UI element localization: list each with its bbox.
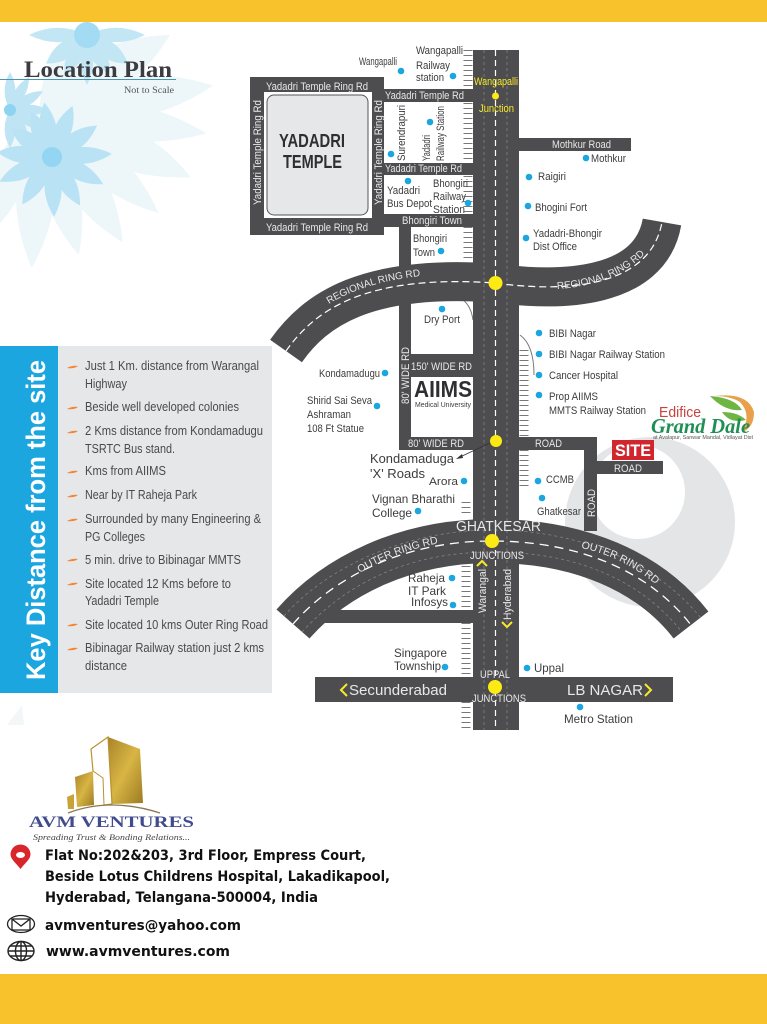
road labels: 80' WIDE RD (408, 438, 464, 450)
road labels: GHATKESAR (456, 518, 541, 535)
icon: gold buildings (67, 737, 160, 813)
bullet list: Near by IT Raheja Park (85, 487, 197, 502)
place labels: Station (433, 204, 465, 216)
roads (250, 50, 691, 730)
top yellow band (0, 0, 767, 22)
title: Location Plan: Not to Scale (124, 86, 174, 96)
AVM Ventures logo (29, 737, 194, 842)
road labels: Warangal (477, 569, 489, 613)
bullet list: Highway (85, 376, 127, 391)
bullet list: Yadadri Temple (85, 593, 159, 608)
place labels: Yadadri (421, 135, 433, 161)
place labels: Dry Port (424, 314, 460, 326)
road labels: REGIONAL RING RD (326, 270, 420, 304)
place labels: Bus Depot (387, 198, 432, 210)
map (250, 45, 754, 730)
Edifice Grand Dale logo (651, 395, 754, 441)
road labels: OUTER RING RD (358, 537, 437, 572)
temple ground (267, 95, 368, 215)
road labels: 80' WIDE RD (400, 347, 412, 404)
place labels: station (416, 72, 444, 84)
road labels: ROAD (614, 463, 642, 475)
bullet list: Surrounded by many Engineering & (85, 511, 261, 526)
bullet list: 5 min. drive to Bibinagar MMTS (85, 552, 241, 567)
place labels: Railway Station (435, 106, 447, 161)
road labels: Junction (479, 103, 514, 115)
AIIMS block label: Medical University (415, 402, 471, 409)
place labels: Singapore (394, 646, 447, 660)
Edifice Grand Dale logo: Edifice (659, 404, 701, 421)
road labels: Secunderabad (349, 682, 447, 699)
bottom yellow band (0, 974, 767, 1024)
place labels: Shirid Sai Seva (307, 395, 373, 407)
road labels: LB NAGAR (567, 682, 643, 699)
email row: avmventures@yahoo.com (45, 918, 241, 934)
bullet list (67, 358, 268, 673)
address block: Hyderabad, Telangana-500004, India (45, 890, 318, 906)
bullet list: Beside well developed colonies (85, 399, 239, 414)
place labels: Railway (416, 60, 450, 72)
place labels: Railway (433, 191, 466, 203)
site marker: SITE (615, 441, 651, 460)
panel: key distance from the site (0, 346, 272, 693)
place labels: Ghatkesar (537, 506, 581, 518)
road labels: Yadadri Temple Ring Rd (266, 81, 368, 93)
place labels: IT Park (408, 584, 447, 598)
place labels: College (372, 506, 412, 520)
place labels: BIBI Nagar (549, 328, 596, 340)
place labels: Raheja (408, 571, 445, 585)
place labels: Surendrapuri (396, 105, 408, 161)
road labels: Mothkur Road (552, 139, 611, 151)
title: Location Plan: Location Plan (24, 57, 172, 82)
road labels: Yadadri Temple Ring Rd (373, 100, 385, 205)
place labels (307, 45, 665, 726)
Kondamaduga X Roads callout: 'X' Roads (370, 466, 425, 481)
direction chevrons (341, 561, 651, 696)
road labels: ROAD (535, 438, 562, 450)
junction markers (485, 92, 502, 694)
road labels (252, 76, 659, 705)
AVM Ventures logo: AVM VENTURES (29, 814, 194, 831)
bullet list: Just 1 Km. distance from Warangal (85, 358, 259, 373)
place labels: Wangapalli (416, 45, 463, 57)
location dots (374, 68, 589, 710)
title: Location Plan (0, 57, 176, 96)
website row (8, 941, 230, 961)
Kondamaduga X Roads callout: Kondamaduga (370, 451, 455, 466)
road labels: Hyderabad (502, 569, 514, 620)
road labels: Yadadri Temple Ring Rd (252, 100, 264, 205)
white inner block of temple ring (264, 92, 372, 218)
Yadadri Temple label (279, 131, 345, 172)
road labels: Yadadri Temple Ring Rd (266, 222, 368, 234)
bullet list: Kms from AIIMS (85, 463, 166, 478)
Edifice Grand Dale logo: at Avalapur, Sanwar Mandal, Vidlayat Dist (653, 435, 754, 441)
road labels: UPPAL (480, 669, 510, 681)
vertical heading: Key Distance from the site (21, 360, 51, 680)
place labels: Prop AIIMS (549, 391, 598, 403)
place labels: Cancer Hospital (549, 370, 618, 382)
place labels: MMTS Railway Station (549, 405, 646, 417)
address block: Flat No:202&203, 3rd Floor, Empress Court, (45, 848, 366, 864)
road labels: Wangapalli (474, 76, 518, 88)
AVM Ventures logo: Spreading Trust & Bonding Relations... (33, 832, 190, 842)
place labels: BIBI Nagar Railway Station (549, 349, 665, 361)
place labels: Yadadri-Bhongir (533, 228, 602, 240)
road labels: OUTER RING RD (582, 542, 659, 583)
road markings (284, 50, 700, 730)
bullet list: PG Colleges (85, 529, 145, 544)
place labels: Infosys (411, 595, 448, 609)
road labels: 150' WIDE RD (411, 361, 472, 373)
place labels: Bhongiri (413, 233, 447, 245)
road labels: JUNCTIONS (472, 693, 526, 705)
icon: envelope (8, 916, 34, 932)
place labels: Mothkur (591, 153, 626, 165)
place labels: Raigiri (538, 171, 566, 183)
Kondamaduga X Roads callout (370, 443, 490, 481)
road labels: Yadadri Temple Rd (385, 163, 462, 175)
place labels: Metro Station (564, 712, 633, 726)
Yadadri Temple label: TEMPLE (283, 152, 342, 172)
icon: map pin (10, 845, 30, 869)
place labels: CCMB (546, 474, 574, 486)
road labels: JUNCTIONS (470, 550, 524, 562)
place labels: Ashraman (307, 409, 351, 421)
AIIMS block label: AIIMS (414, 376, 472, 402)
bullet list: Site located 10 kms Outer Ring Road (85, 617, 268, 632)
grey ring behind site (565, 437, 735, 607)
place labels: Dist Office (533, 241, 577, 253)
place labels: Vignan Bharathi (372, 492, 455, 506)
place labels: Bhogini Fort (535, 202, 587, 214)
background flowers (0, 17, 216, 725)
place labels: Town (413, 247, 435, 259)
place labels: 108 Ft Statue (307, 423, 364, 435)
place labels: Uppal (534, 661, 564, 675)
address block: Beside Lotus Childrens Hospital, Lakadikapool, (45, 869, 390, 885)
bullet list: Bibinagar Railway station just 2 kms (85, 640, 264, 655)
website row: www.avmventures.com (46, 944, 230, 960)
place labels: Township (394, 659, 441, 673)
bullet list: TSRTC Bus stand. (85, 441, 175, 456)
road labels: ROAD (586, 489, 598, 517)
bullet list: 2 Kms distance from Kondamadugu (85, 423, 263, 438)
icon: globe (8, 941, 34, 961)
address block (10, 845, 390, 906)
place labels: Bhongiri (433, 178, 468, 190)
road labels: Yadadri Temple Rd (385, 90, 464, 102)
place labels: Arora (429, 476, 459, 488)
place labels: Yadadri (387, 185, 420, 197)
road labels: Bhongiri Town (402, 215, 462, 227)
place labels: Kondamadugu (319, 368, 380, 380)
Edifice Grand Dale logo: Grand Dale (651, 414, 750, 438)
bullet list: distance (85, 658, 127, 673)
bullet list: Site located 12 Kms before to (85, 576, 231, 591)
railway tracks (463, 50, 534, 728)
Yadadri Temple label: YADADRI (279, 131, 345, 151)
road labels: REGIONAL RING RD (557, 250, 644, 289)
place labels: Wangapalli (359, 56, 397, 68)
